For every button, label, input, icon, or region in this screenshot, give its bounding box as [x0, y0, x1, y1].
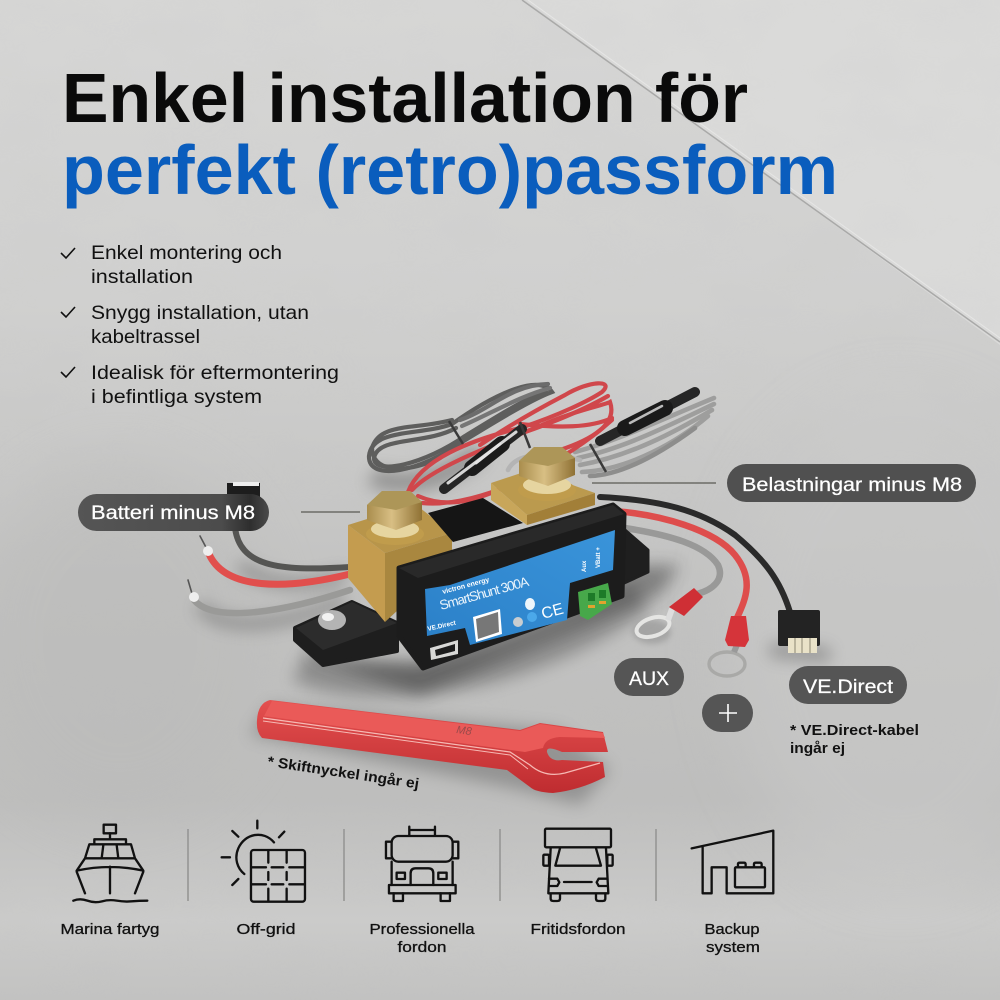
mounting tab right [622, 530, 648, 584]
benefit 1 [61, 242, 282, 288]
device body [399, 505, 624, 668]
icon: professional truck [386, 827, 458, 901]
label: AUX: AUX [629, 668, 669, 690]
benefit 3 [61, 362, 339, 408]
fuse holder 2 [600, 392, 695, 441]
benefit 1: Enkel montering och [91, 242, 282, 264]
benefit 1: installation [91, 266, 193, 288]
left connector behind label [227, 482, 260, 497]
centre bar [428, 498, 523, 542]
brass block right [491, 470, 595, 525]
benefit 3: Idealisk för eftermontering [91, 362, 339, 384]
benefit 3: i befintliga system [91, 386, 262, 408]
label: Belastningar minus M8: Belastningar minus M8 [742, 474, 962, 496]
title: perfekt (retro)passform [62, 131, 838, 209]
icon: ship [73, 825, 147, 902]
terminal labels: VBatt + [596, 547, 602, 568]
wrench [250, 700, 610, 805]
benefit 2 [61, 302, 309, 348]
benefit 2: Snygg installation, utan [91, 302, 309, 324]
note: wrench: * Skiftnyckel ingår ej [266, 754, 420, 793]
wrench size mark: M8 [456, 724, 473, 738]
device logo: victron energy [442, 577, 490, 596]
device name: SmartShunt 300A [438, 574, 530, 613]
label: Professionella fordon [370, 921, 475, 956]
right bolt [518, 447, 576, 501]
terminal labels: Aux [582, 560, 588, 572]
VE.Direct port [430, 640, 458, 660]
label: Belastningar minus M8 [727, 464, 976, 502]
benefit list [61, 242, 339, 408]
screw [318, 610, 346, 630]
device shadow [300, 565, 680, 695]
left bolt [366, 491, 424, 545]
category labels [60, 921, 760, 956]
green terminal [578, 583, 612, 620]
icon: recreational vehicle [543, 829, 613, 901]
right side cables [600, 497, 790, 618]
port label: VE.Direct [427, 619, 457, 633]
note: VE.Direct cable: ingår ej [790, 741, 845, 757]
AUX ring terminal [633, 588, 703, 644]
VE.Direct connector [778, 610, 820, 653]
label: VE.Direct: VE.Direct [803, 676, 894, 698]
label: Backup system: Backup [704, 921, 760, 938]
benefit 2: kabeltrassel [91, 326, 200, 348]
label: Backup system: system [706, 939, 760, 956]
note: VE.Direct cable [790, 723, 919, 757]
plus ring terminal [709, 616, 749, 676]
label: Professionella fordon: fordon [398, 939, 446, 956]
CE mark: CE [540, 601, 566, 623]
terminal labels [582, 547, 602, 572]
note: VE.Direct cable: * VE.Direct-kabel [790, 723, 919, 739]
label: Marina fartyg: Marina fartyg [60, 921, 160, 938]
mounting foot left [295, 602, 397, 665]
label: plus [702, 694, 753, 732]
dark grey cable coil [369, 384, 552, 471]
dividers [188, 829, 656, 901]
left side cables [188, 528, 350, 613]
blue front label [425, 530, 615, 645]
label: Backup system [704, 921, 760, 956]
icon: off-grid solar [222, 821, 305, 902]
product photo: SmartShunt with cables [188, 383, 830, 695]
title [62, 59, 838, 209]
fuse holder 1 [444, 429, 522, 489]
cable ties [449, 421, 606, 472]
cable shadows [200, 450, 830, 680]
label: VE.Direct [789, 666, 907, 704]
brass block left [348, 504, 452, 622]
icon: backup system garage [692, 831, 773, 893]
label: Fritidsfordon: Fritidsfordon [530, 921, 626, 938]
grey cable bundle right [508, 398, 714, 476]
label: Off-grid: Off-grid [236, 921, 296, 938]
status LEDs [513, 598, 537, 627]
connector lines [301, 483, 716, 512]
label: Professionella fordon: Professionella [370, 921, 475, 938]
label: Batteri minus M8: Batteri minus M8 [91, 502, 255, 524]
label: AUX [614, 658, 684, 696]
red cable coil [408, 383, 612, 504]
label: Batteri minus M8 [78, 494, 269, 531]
QR code [473, 609, 502, 642]
title: Enkel installation för [62, 59, 748, 137]
